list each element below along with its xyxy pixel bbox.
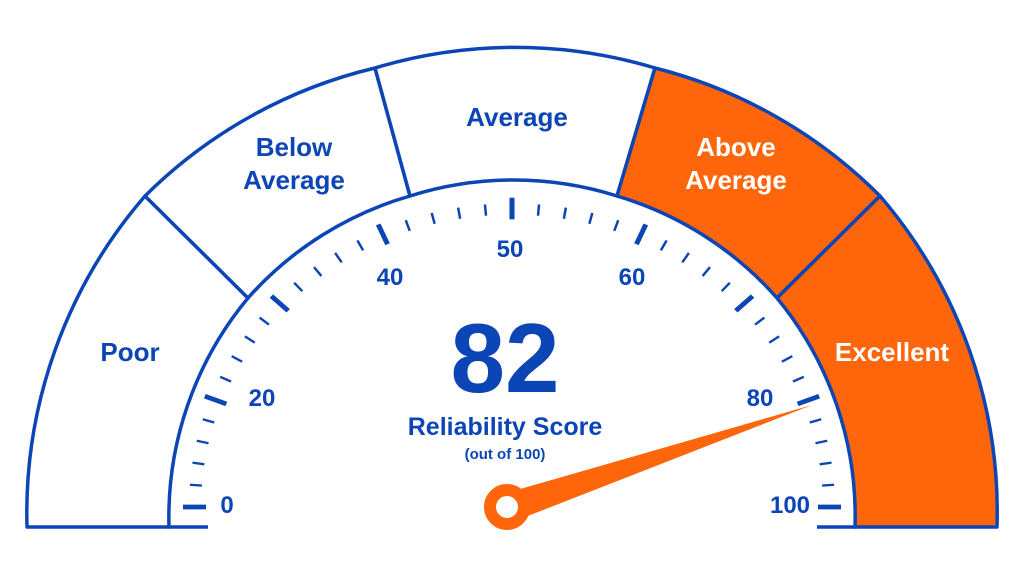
segment labels: Poor (100, 337, 160, 367)
segment labels: Average (685, 165, 787, 195)
segment labels: Below (256, 132, 333, 162)
scale labels: 20 (249, 385, 275, 412)
scale labels: 50 (497, 236, 523, 263)
segment labels (100, 102, 949, 367)
score value: 82 (450, 303, 560, 413)
score caption: Reliability Score (408, 413, 602, 441)
segment labels: Average (243, 165, 345, 195)
needle (490, 405, 812, 524)
scale labels: 40 (377, 264, 403, 291)
scale labels: 100 (770, 492, 810, 519)
segment labels: Above (696, 132, 776, 162)
segment: poor (27, 196, 248, 527)
segment labels: Average (466, 102, 568, 132)
score subcaption: (out of 100) (465, 446, 545, 463)
segment: below average (145, 68, 410, 298)
gauge segments (27, 47, 997, 527)
scale labels: 80 (747, 385, 773, 412)
segment labels: Excellent (835, 337, 949, 367)
inner baseline stubs (167, 525, 857, 529)
segment: excellent (777, 196, 997, 527)
scale labels: 60 (619, 264, 645, 291)
scale labels (220, 236, 810, 519)
scale labels: 0 (220, 492, 234, 519)
segment: average (375, 47, 655, 196)
segment: above average (617, 68, 880, 298)
tick marks (183, 198, 841, 507)
